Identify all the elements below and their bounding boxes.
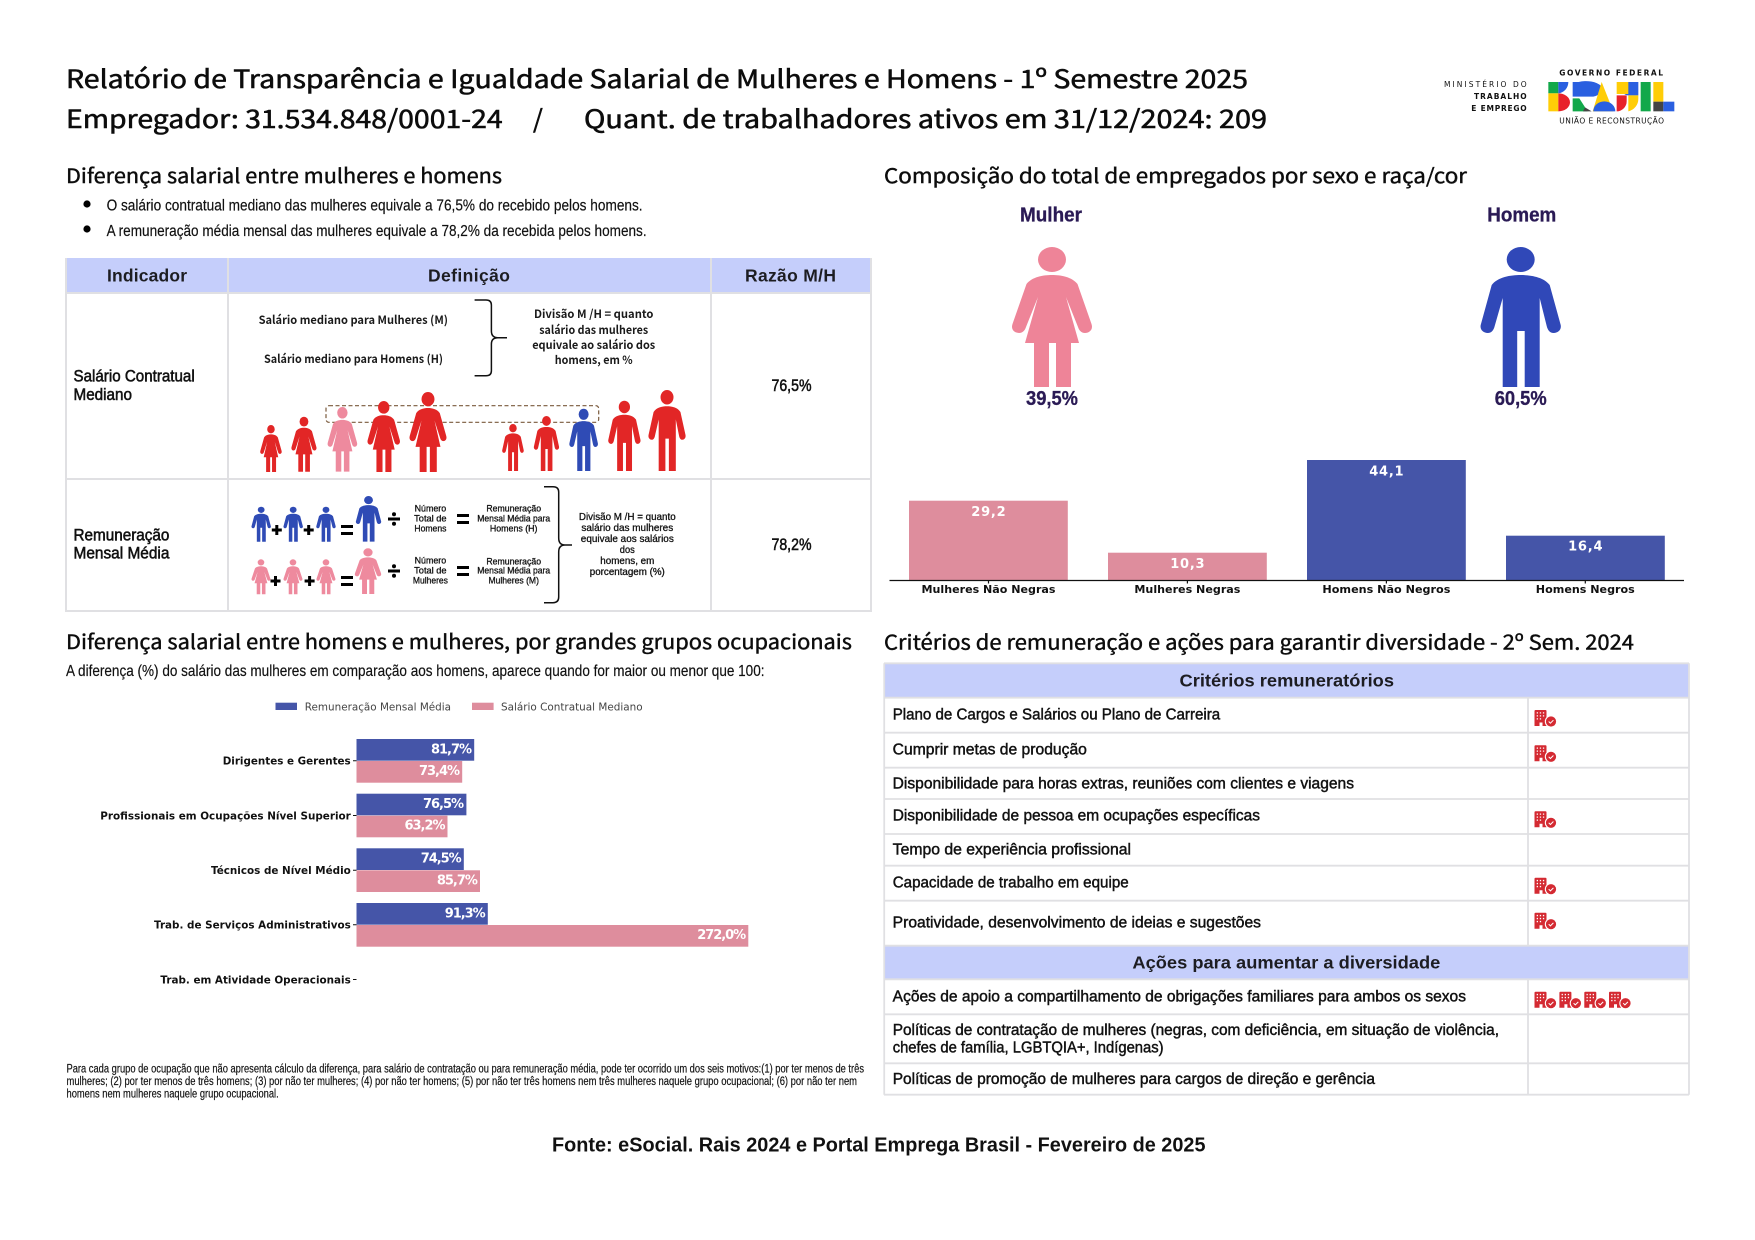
bar chart: grupos ocupacionais: Profissionais em Ocupações Nível Superior <box>100 810 352 822</box>
bar chart: grupos ocupacionais: 63,2% <box>404 819 446 834</box>
row: remuneração mensal média: dos <box>620 545 635 556</box>
title: Quant. de trabalhadores ativos em 31/12/2024: 209 <box>584 100 1267 136</box>
pictogram: homem <box>1481 205 1561 410</box>
icons: empresas <box>1534 710 1632 1009</box>
formula: mulheres: Mulheres <box>413 576 448 586</box>
subtitle: A diferença (%) do salário das mulheres em comparação aos homens, aparece quando for maior ou menor que 100: <box>66 663 764 680</box>
table: critérios remuneratórios: Plano de Cargos e Salários ou Plano de Carreira <box>893 706 1221 723</box>
source line: Fonte: eSocial. Rais 2024 e Portal Emprega Brasil - Fevereiro de 2025 <box>552 1135 1206 1157</box>
row: salário contratual mediano: equivale ao salário dos <box>532 337 655 353</box>
row: remuneração mensal média: porcentagem (%) <box>590 567 665 578</box>
logo: ministério e governo federal <box>1444 69 1674 125</box>
footnote <box>66 1064 864 1100</box>
bullet list <box>83 198 647 240</box>
bar chart: grupos ocupacionais <box>100 739 748 986</box>
title: / <box>533 100 543 136</box>
table: critérios remuneratórios: Disponibilidade de pessoa em ocupações específicas <box>893 808 1260 825</box>
bar chart: grupos ocupacionais: Trab. de Serviços Administrativos <box>154 920 351 932</box>
title <box>66 60 1267 136</box>
formula: homens <box>251 496 550 542</box>
table: critérios remuneratórios: Políticas de promoção de mulheres para cargos de direção e gerência <box>893 1071 1375 1088</box>
pictogram: homem: Homem <box>1487 205 1556 227</box>
mediana dashed box <box>326 406 599 422</box>
bar chart: grupos ocupacionais: 74,5% <box>421 852 462 867</box>
bar chart: composição: Mulheres Não Negras <box>922 584 1056 596</box>
panel: diferença salarial <box>65 160 872 611</box>
legend <box>276 702 643 714</box>
logo: ministério e governo federal: GOVERNO FEDERAL <box>1559 69 1663 78</box>
formula: mulheres: Mulheres (M) <box>488 576 539 586</box>
bar chart: grupos ocupacionais: 91,3% <box>445 906 486 921</box>
table: indicadores: Definição <box>428 266 510 286</box>
table: critérios remuneratórios: Tempo de experiência profissional <box>893 841 1131 858</box>
bullet list: O salário contratual mediano das mulheres equivale a 76,5% do recebido pelos homens. <box>107 198 643 214</box>
bar chart: grupos ocupacionais: 272,0% <box>697 928 746 943</box>
row: remuneração mensal média <box>74 487 812 603</box>
formula: mulheres: Total de <box>414 566 447 576</box>
bar chart: grupos ocupacionais: 73,4% <box>419 764 460 779</box>
bar chart: grupos ocupacionais: Técnicos de Nível Médio <box>211 865 351 877</box>
formula: homens: Número <box>415 504 446 514</box>
row: salário contratual mediano: Mediano <box>74 386 132 404</box>
row: salário contratual mediano: Salário mediano para Homens (H) <box>264 351 443 367</box>
table: critérios remuneratórios: Ações para aumentar a diversidade <box>1132 952 1441 972</box>
logo: ministério e governo federal: MINISTÉRIO DO <box>1444 80 1527 89</box>
row: salário contratual mediano <box>74 300 812 472</box>
heading: critérios: Critérios de remuneração e ações para garantir diversidade - 2º Sem. 2024 <box>884 626 1634 655</box>
panel: critérios e ações <box>884 626 1689 1095</box>
bar chart: composição: Homens Não Negros <box>1322 584 1450 596</box>
pictogram: mulher: 39,5% <box>1026 388 1078 410</box>
row: salário contratual mediano: Salário mediano para Mulheres (M) <box>259 312 448 328</box>
formula: mulheres: Remuneração <box>486 557 541 567</box>
table: critérios remuneratórios <box>884 663 1689 1095</box>
bar chart: grupos ocupacionais: 85,7% <box>437 873 478 888</box>
formula: homens: Total de <box>414 514 447 524</box>
figures: mulheres <box>260 392 446 472</box>
row: salário contratual mediano: 76,5% <box>772 377 812 395</box>
bar chart: grupos ocupacionais: 81,7% <box>431 742 472 757</box>
bar chart: composição: Homens Negros <box>1536 584 1635 596</box>
bar chart: composição: 44,1 <box>1369 464 1404 479</box>
pictogram: mulher: Mulher <box>1020 205 1082 227</box>
bar chart: composição: 16,4 <box>1568 540 1603 555</box>
bullet list: A remuneração média mensal das mulheres equivale a 78,2% da recebida pelos homens. <box>107 223 647 240</box>
table: critérios remuneratórios: Proatividade, desenvolvimento de ideias e sugestões <box>893 914 1261 931</box>
formula: homens: Remuneração <box>486 504 541 514</box>
figures: homens <box>502 390 686 471</box>
table: critérios remuneratórios: Critérios remuneratórios <box>1180 671 1394 691</box>
row: salário contratual mediano: Divisão M /H = quanto <box>534 306 653 322</box>
formula: mulheres: Número <box>415 556 446 566</box>
logo: ministério e governo federal: UNIÃO E RECONSTRUÇÃO <box>1559 116 1664 125</box>
row: remuneração mensal média: Mensal Média <box>74 544 170 562</box>
formula: homens: Mensal Média para <box>477 514 550 524</box>
row: remuneração mensal média: Divisão M /H = quanto <box>579 512 676 523</box>
bar chart: grupos ocupacionais: Trab. em Atividade Operacionais <box>160 974 351 986</box>
footnote: homens nem mulheres naquele grupo ocupacional. <box>66 1088 279 1100</box>
row: remuneração mensal média: equivale aos salários <box>581 534 674 545</box>
heading: composição: Composição do total de empregados por sexo e raça/cor <box>884 160 1467 189</box>
table: critérios remuneratórios: Políticas de contratação de mulheres (negras, com deficiência, em situação de violência, <box>893 1022 1499 1039</box>
footnote: Para cada grupo de ocupação que não apresenta cálculo da diferença, para salário de contratação ou para remuneração média, pode ter ocorrido um dos seis motivos:(1) por ter menos de três <box>66 1064 864 1076</box>
table: critérios remuneratórios: Cumprir metas de produção <box>893 741 1087 758</box>
table: critérios remuneratórios: Disponibilidade para horas extras, reuniões com clientes e viagens <box>893 775 1354 792</box>
formula: mulheres <box>252 548 550 594</box>
title: Relatório de Transparência e Igualdade Salarial de Mulheres e Homens - 1º Semestre 2025 <box>66 60 1248 96</box>
title: Empregador: 31.534.848/0001-24 <box>66 100 503 136</box>
bar chart: grupos ocupacionais: Dirigentes e Gerentes <box>223 756 351 768</box>
table: indicadores: Indicador <box>107 266 187 286</box>
formula: homens: Homens (H) <box>490 524 538 534</box>
row: remuneração mensal média: Remuneração <box>74 527 169 545</box>
heading: diferença salarial: Diferença salarial entre mulheres e homens <box>66 160 502 189</box>
bar chart: composição: 10,3 <box>1170 557 1205 572</box>
row: salário contratual mediano: homens, em % <box>555 352 633 368</box>
formula: mulheres: Mensal Média para <box>477 566 550 576</box>
legend: Remuneração Mensal Média <box>305 702 451 714</box>
row: salário contratual mediano: salário das mulheres <box>539 322 648 338</box>
table: indicadores <box>65 258 872 611</box>
panel: composição <box>884 160 1684 596</box>
formula: homens: Homens <box>414 524 447 534</box>
bar chart: composição: 29,2 <box>971 505 1006 520</box>
table: indicadores: Razão M/H <box>745 266 836 286</box>
legend: Salário Contratual Mediano <box>501 702 643 714</box>
row: remuneração mensal média: 78,2% <box>772 536 812 554</box>
panel: grupos ocupacionais <box>66 626 864 1100</box>
logo: ministério e governo federal: E EMPREGO <box>1471 104 1527 113</box>
pictogram: homem: 60,5% <box>1495 388 1547 410</box>
table: critérios remuneratórios: Ações de apoio a compartilhamento de obrigações familiares para ambos os sexos <box>893 989 1466 1006</box>
logo: ministério e governo federal: TRABALHO <box>1474 92 1527 101</box>
bar chart: composição: Mulheres Negras <box>1134 584 1240 596</box>
row: remuneração mensal média: homens, em <box>600 556 654 567</box>
pictogram: mulher <box>1012 205 1092 410</box>
row: salário contratual mediano: Salário Contratual <box>74 368 195 386</box>
row: remuneração mensal média: salário das mulheres <box>581 523 673 534</box>
bar chart: composição <box>890 460 1684 596</box>
bar chart: grupos ocupacionais: 76,5% <box>423 797 464 812</box>
footnote: mulheres; (2) por ter menos de três homens; (3) por não ter mulheres; (4) por não ter homens; (5) por não ter três homens nem três mulheres naquele grupo ocupacional; (6) por não ter nem <box>66 1076 857 1088</box>
table: critérios remuneratórios: Capacidade de trabalho em equipe <box>893 875 1129 892</box>
table: critérios remuneratórios: chefes de família, LGBTQIA+, Indígenas) <box>893 1040 1164 1057</box>
heading: grupos ocupacionais: Diferença salarial entre homens e mulheres, por grandes grupos ocupacionais <box>66 626 852 655</box>
